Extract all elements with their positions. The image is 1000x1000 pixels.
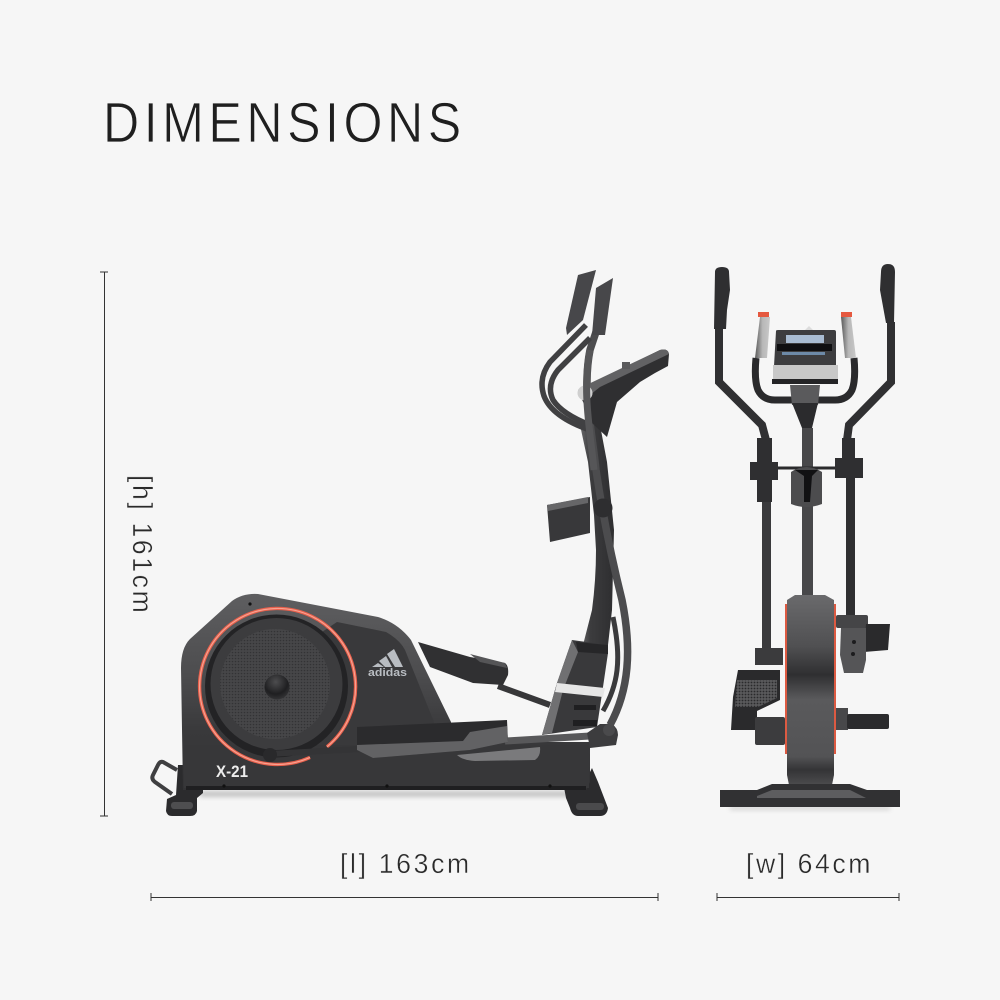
floor shadow: [200, 791, 570, 797]
cup holder: [547, 497, 590, 542]
moving arm over bars: [587, 350, 594, 470]
left handle arm: [714, 267, 778, 652]
cup holder: [791, 467, 822, 507]
moving handle arm: [587, 332, 628, 725]
adidas logo: adidas: [368, 667, 407, 679]
beam: [184, 745, 589, 788]
fixed handlebars: [542, 325, 590, 430]
console: [772, 326, 838, 384]
bottom edge: [186, 786, 586, 790]
base shadow: [730, 806, 890, 810]
flywheel housing: [181, 594, 590, 790]
length label: [l] 163cm: [340, 847, 469, 879]
side view elliptical trainer: [152, 270, 669, 816]
center post: [802, 428, 813, 596]
console side: [578, 350, 669, 437]
pedal rail: [263, 724, 618, 762]
wheel cover: [457, 747, 540, 761]
cross bar: [778, 466, 835, 470]
rear pedal and rod: [418, 642, 550, 705]
handle grips: [566, 270, 613, 335]
flywheel disc: [205, 614, 348, 758]
right handle arm: [835, 264, 895, 615]
height dimension line: [100, 272, 108, 816]
flywheel front: [785, 595, 836, 785]
title: DIMENSIONS: [103, 91, 461, 155]
mini handle left: [755, 312, 792, 400]
column base box: [542, 640, 608, 735]
front base: [720, 784, 900, 807]
front foot: [563, 768, 608, 816]
mini handle right: [818, 312, 856, 400]
front pedal: [357, 720, 508, 758]
height label: [h] 161cm: [127, 475, 159, 613]
main post: [580, 425, 614, 645]
adidas logo: [368, 649, 407, 679]
housing dark panel: [300, 622, 436, 745]
width label: [w] 64cm: [746, 847, 870, 879]
length dimension line: [151, 893, 658, 901]
housing dots: [222, 602, 552, 788]
console neck: [790, 385, 820, 428]
knob: [594, 498, 612, 518]
width dimension line: [717, 893, 899, 901]
front view elliptical trainer: [714, 264, 900, 810]
rear foot and handle: [152, 762, 203, 816]
red ring: [200, 608, 356, 764]
model label: X-21: [216, 763, 248, 781]
left pedal: [731, 648, 785, 745]
right pedal and axle: [836, 615, 890, 730]
